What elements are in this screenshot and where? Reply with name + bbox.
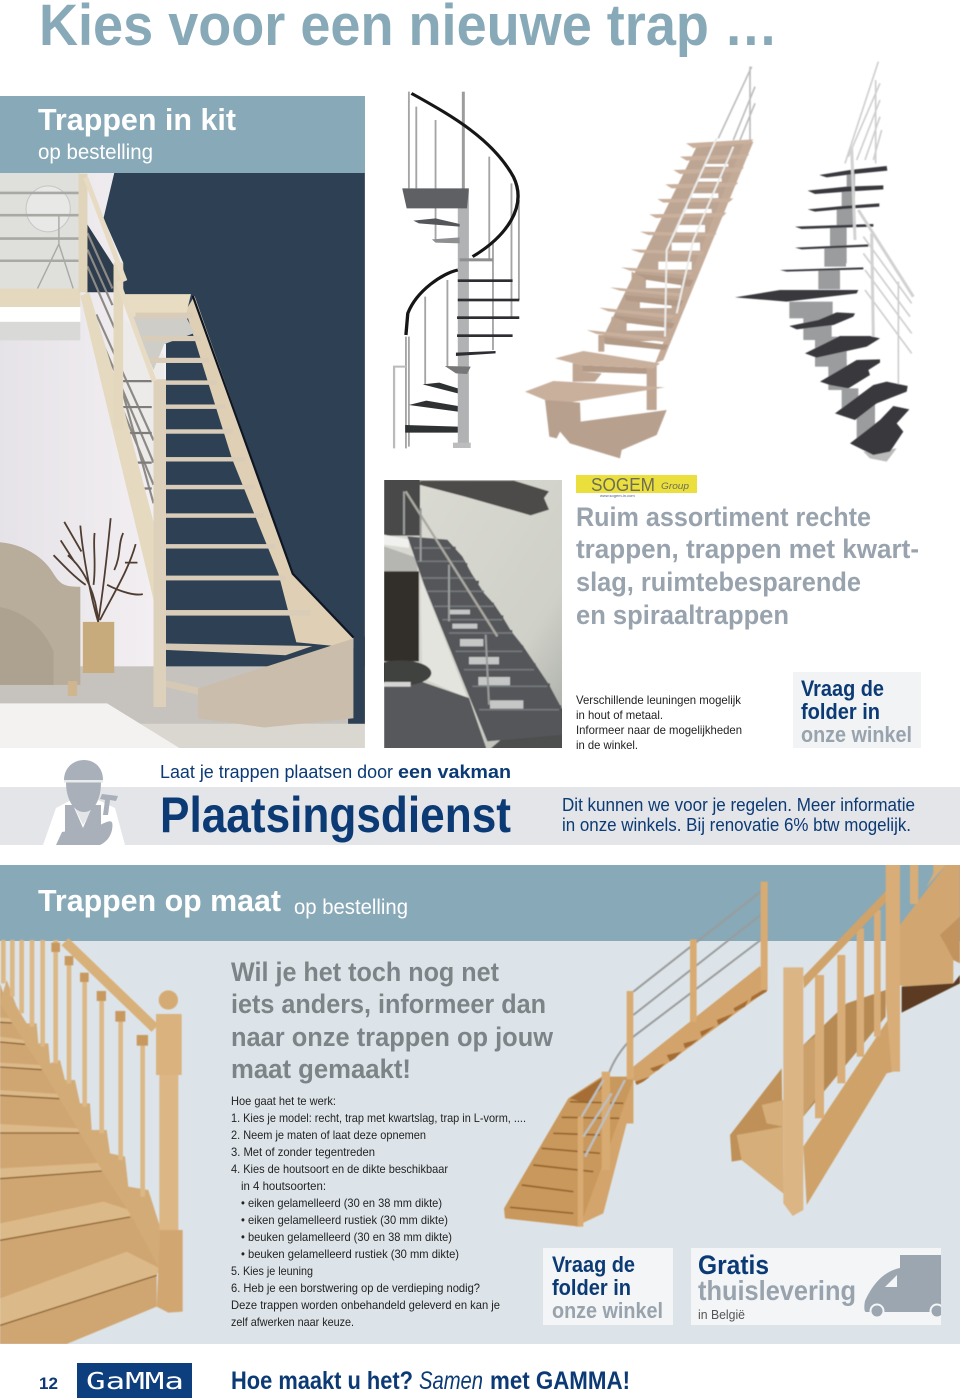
photo: oak stair with turned balusters [0,940,183,1344]
logo: GAMMA: GaMMa [86,1369,184,1395]
callout: folder (bottom): onze winkel [552,1298,663,1323]
text block: how it works: • beuken gelamelleerd rustiek (30 mm dikte) [241,1247,459,1261]
text block: how it works: 3. Met of zonder tegentreden [231,1145,375,1159]
icon: worker with hammer [43,760,125,845]
photo: oak stair with metal rails [504,882,768,1227]
text block: how it works: • eiken gelamelleerd (30 en 38 mm dikte) [241,1196,442,1210]
photo: dark stair in loft [384,480,562,748]
callout: folder (top): Vraag de [801,676,884,701]
slogan [231,1367,630,1395]
heading: assortment [576,502,919,630]
text block: railings: Informeer naar de mogelijkheden [576,723,742,737]
slogan: met GAMMA! [490,1367,630,1395]
text block: how it works: Hoe gaat het te werk: [231,1094,336,1108]
text block: how it works [231,1094,526,1329]
callout: folder (top): folder in [801,699,880,724]
heading: Wil je het toch nog net [231,957,554,1084]
text block: railings: in hout of metaal. [576,708,663,722]
header band: Trappen in kit: Trappen in kit [38,102,236,137]
text block: how it works: 2. Neem je maten of laat deze opnemen [231,1128,426,1142]
heading: Wil je het toch nog net: iets anders, informeer dan [231,989,546,1019]
header band: Trappen op maat [0,865,960,941]
panel: made-to-measure background [0,941,960,1344]
logo: Sogem: www.sogem-in.com [600,493,635,498]
header band: Trappen op maat: op bestelling [294,896,408,919]
text block: how it works: • beuken gelamelleerd (30 en 38 mm dikte) [241,1230,452,1244]
text block: railings: Verschillende leuningen mogelijk [576,693,742,707]
heading: assortment: slag, ruimtebesparende [576,567,861,597]
callout: folder (bottom): folder in [552,1275,631,1300]
callout: free delivery: Gratis [698,1250,769,1280]
heading: assortment: en spiraaltrappen [576,600,789,630]
callout: folder (bottom): Vraag de [552,1252,635,1277]
heading: assortment: trappen, trappen met kwart- [576,534,919,564]
text: placement info: in onze winkels. Bij renovatie 6% btw mogelijk. [562,814,911,835]
callout: free delivery: thuislevering [698,1275,856,1306]
text: een vakman: een vakman [398,762,511,782]
heading: Wil je het toch nog net: Wil je het toch nog net [231,957,499,987]
photo: spiral stair [394,92,519,448]
callout: folder (top) [793,672,921,748]
heading: assortment: Ruim assortiment rechte [576,502,871,532]
text block: how it works: 6. Heb je een borstwering op de verdieping nodig? [231,1281,480,1295]
callout: free delivery: in België [698,1308,745,1322]
photo: wooden straight stair with winders [525,67,755,458]
text: placement info: Dit kunnen we voor je regelen. Meer informatie [562,794,915,815]
slogan: Samen [419,1367,483,1395]
photo: living room with wooden stair [0,170,365,750]
text block: railings [576,693,742,752]
callout: folder (bottom) [543,1248,673,1325]
text block: how it works: 4. Kies de houtsoort en de dikte beschikbaar [231,1162,448,1176]
callout: free delivery [691,1248,944,1325]
page number: 12 [39,1374,58,1393]
logo: GAMMA [77,1363,192,1398]
photo: dark stair with central spine [735,62,913,462]
text: een vakman: Laat je trappen plaatsen door [160,762,393,782]
text block: how it works: 1. Kies je model: recht, trap met kwartslag, trap in L-vorm, .... [231,1111,526,1125]
header band: Trappen in kit: op bestelling [38,141,153,164]
callout: folder (top): onze winkel [801,722,912,747]
text block: how it works: • eiken gelamelleerd rustiek (30 mm dikte) [241,1213,448,1227]
slogan: Hoe maakt u het? [231,1367,413,1395]
logo: Sogem: SOGEM [591,475,655,495]
header band: Trappen op maat: Trappen op maat [38,883,281,918]
heading: Plaatsingsdienst: Plaatsingsdienst [160,787,511,843]
band: Plaatsingsdienst background [0,787,960,845]
logo: Sogem: Group [661,481,689,491]
header band: Trappen in kit [0,96,365,173]
text: placement info [562,794,915,835]
icon: delivery van [864,1255,944,1318]
text block: how it works: Deze trappen worden onbehandeld geleverd en kan je [231,1298,500,1312]
text block: how it works: 5. Kies je leuning [231,1264,313,1278]
photo: oak quarter-turn stair [730,864,960,1216]
text block: how it works: zelf afwerken naar keuze. [231,1315,354,1329]
logo: Sogem [576,475,697,498]
text block: how it works: in 4 houtsoorten: [241,1179,326,1193]
text: een vakman [160,762,511,782]
heading: Wil je het toch nog net: naar onze trappen op jouw [231,1022,554,1052]
heading: Wil je het toch nog net: maat gemaakt! [231,1054,411,1084]
text block: railings: in de winkel. [576,738,638,752]
